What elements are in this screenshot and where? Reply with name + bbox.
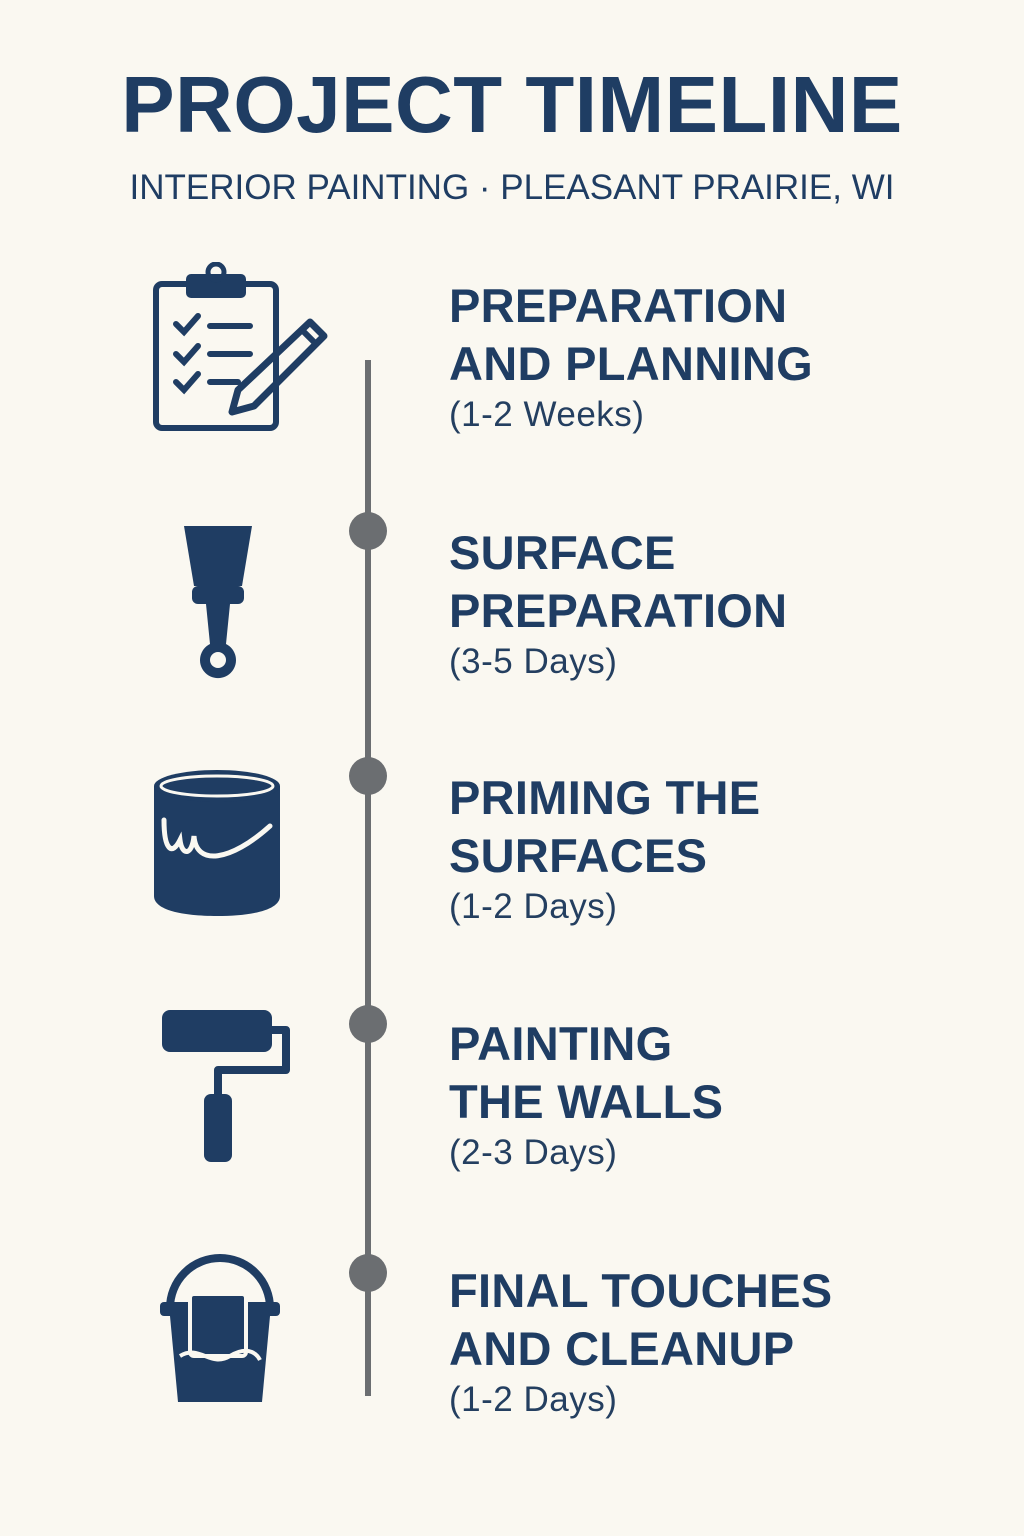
step 1 text: (1-2 Weeks): [449, 395, 644, 434]
icon: clipboard: [153, 262, 328, 431]
step 1 text: PREPARATION: [449, 279, 787, 332]
step 3 text: PRIMING THE: [449, 771, 760, 824]
step 5 text: AND CLEANUP: [449, 1322, 794, 1375]
step 5 text: (1-2 Days): [449, 1380, 617, 1419]
subtitle: INTERIOR PAINTING · PLEASANT PRAIRIE, WI: [130, 168, 894, 207]
step 4 text: PAINTING: [449, 1017, 672, 1070]
step 4 text: THE WALLS: [449, 1075, 723, 1128]
icon: bucket: [160, 1254, 280, 1402]
timeline dot 4: [349, 1254, 387, 1292]
step 3 text: SURFACES: [449, 829, 707, 882]
timeline dot 1: [349, 512, 387, 550]
step 4 text: (2-3 Days): [449, 1133, 617, 1172]
title: PROJECT TIMELINE: [121, 60, 903, 149]
step 1 text: AND PLANNING: [449, 337, 813, 390]
step 1 text: [449, 279, 813, 434]
icon: paint can: [154, 770, 280, 916]
step 2 text: (3-5 Days): [449, 642, 617, 681]
timeline dot 3: [349, 1005, 387, 1043]
step 2 text: SURFACE: [449, 526, 676, 579]
step 4 text: [449, 1017, 723, 1172]
step 3 text: [449, 771, 760, 926]
step 3 text: (1-2 Days): [449, 887, 617, 926]
icon: paint roller: [162, 1010, 290, 1162]
icon: scraper: [184, 526, 252, 678]
step 5 text: FINAL TOUCHES: [449, 1264, 832, 1317]
timeline line: [365, 360, 371, 1396]
step 2 text: PREPARATION: [449, 584, 787, 637]
step 5 text: [449, 1264, 832, 1419]
step 2 text: [449, 526, 787, 681]
timeline dot 2: [349, 757, 387, 795]
